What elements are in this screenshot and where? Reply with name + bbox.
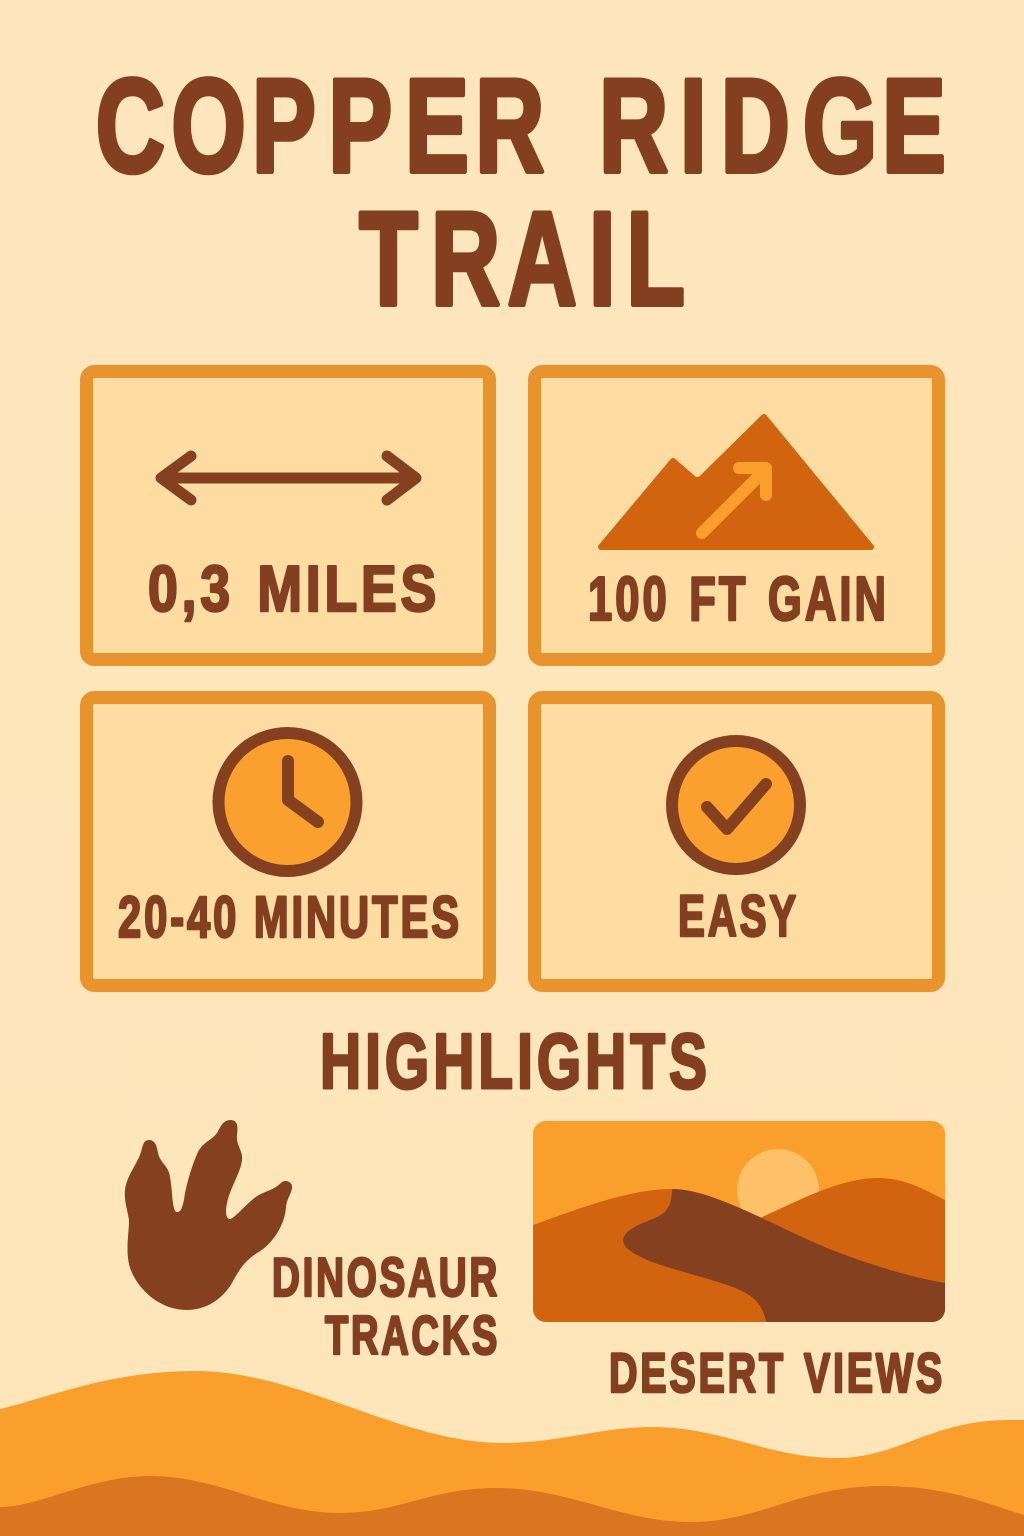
panel: distance <box>86 372 490 660</box>
title: TRAIL <box>359 184 685 333</box>
heading: highlights: HIGHLIGHTS <box>320 1017 711 1105</box>
far dune <box>758 1178 945 1322</box>
icon: dinosaur footprint <box>125 1120 292 1310</box>
panel: difficulty <box>534 698 938 986</box>
icon: mountain with arrow <box>601 417 871 547</box>
title <box>96 51 946 333</box>
elevation label: 100 FT GAIN <box>588 565 889 634</box>
icon: double-headed arrow <box>161 456 416 500</box>
shadowed dune face <box>623 1189 945 1322</box>
difficulty label: EASY <box>678 884 799 949</box>
illustration: desert dunes at sunset <box>533 1121 945 1322</box>
title: COPPER RIDGE <box>96 51 946 200</box>
label: dinosaur tracks <box>272 1246 500 1366</box>
foreground dune: light orange <box>0 1371 1024 1536</box>
duration label: 20-40 MINUTES <box>118 885 462 950</box>
label: dinosaur tracks: DINOSAUR <box>272 1246 500 1308</box>
panel: elevation gain <box>534 372 938 660</box>
icon: clock <box>218 733 356 871</box>
distance label: 0,3 MILES <box>148 552 440 625</box>
icon: check mark in circle <box>672 741 800 869</box>
near dune <box>533 1189 945 1322</box>
label: dinosaur tracks: TRACKS <box>325 1304 500 1366</box>
foreground dune: dark orange <box>0 1476 1024 1536</box>
sun <box>737 1149 819 1218</box>
panel: duration <box>86 698 490 986</box>
